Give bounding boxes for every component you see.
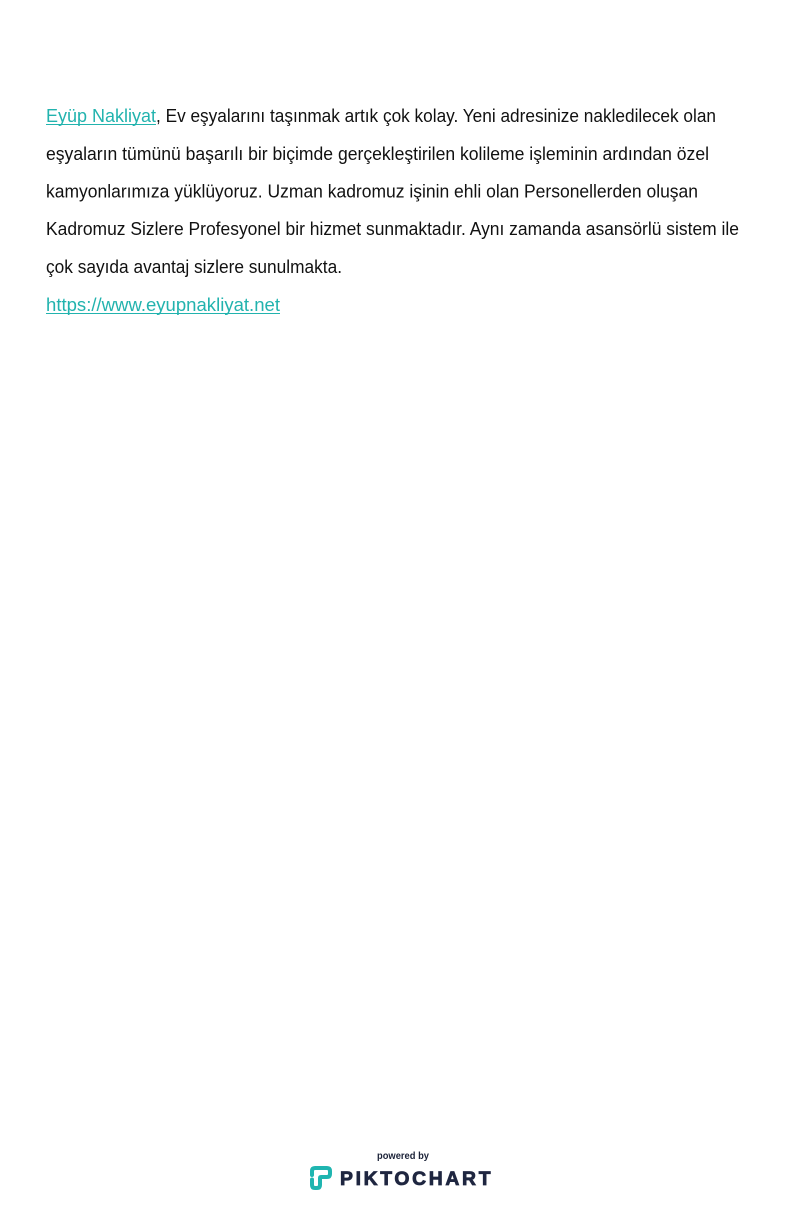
paragraph line 2: eşyaların tümünü başarılı bir biçimde gerçekleştirilen kolileme işleminin ardından özel [46,144,709,164]
paragraph line 5: çok sayıda avantaj sizlere sunulmakta. [46,257,342,277]
paragraph line 1: , Ev eşyalarını taşınmak artık çok kolay. Yeni adresinize nakledilecek olan [156,106,716,126]
text block: company description [46,106,739,315]
footer: powered by Piktochart [312,1151,493,1190]
caption: powered by: powered by [377,1151,429,1162]
icon: Piktochart logo mark [312,1168,330,1188]
link: website URL: https://www.eyupnakliyat.net [46,295,280,315]
link: Eyüp Nakliyat: Eyüp Nakliyat [46,106,156,126]
paragraph line 3: kamyonlarımıza yüklüyoruz. Uzman kadromuz işinin ehli olan Personellerden oluşan [46,182,698,202]
paragraph line 4: Kadromuz Sizlere Profesyonel bir hizmet sunmaktadır. Aynı zamanda asansörlü sistem ile [46,219,739,239]
wordmark: PIKTOCHART: PIKTOCHART [340,1169,493,1190]
